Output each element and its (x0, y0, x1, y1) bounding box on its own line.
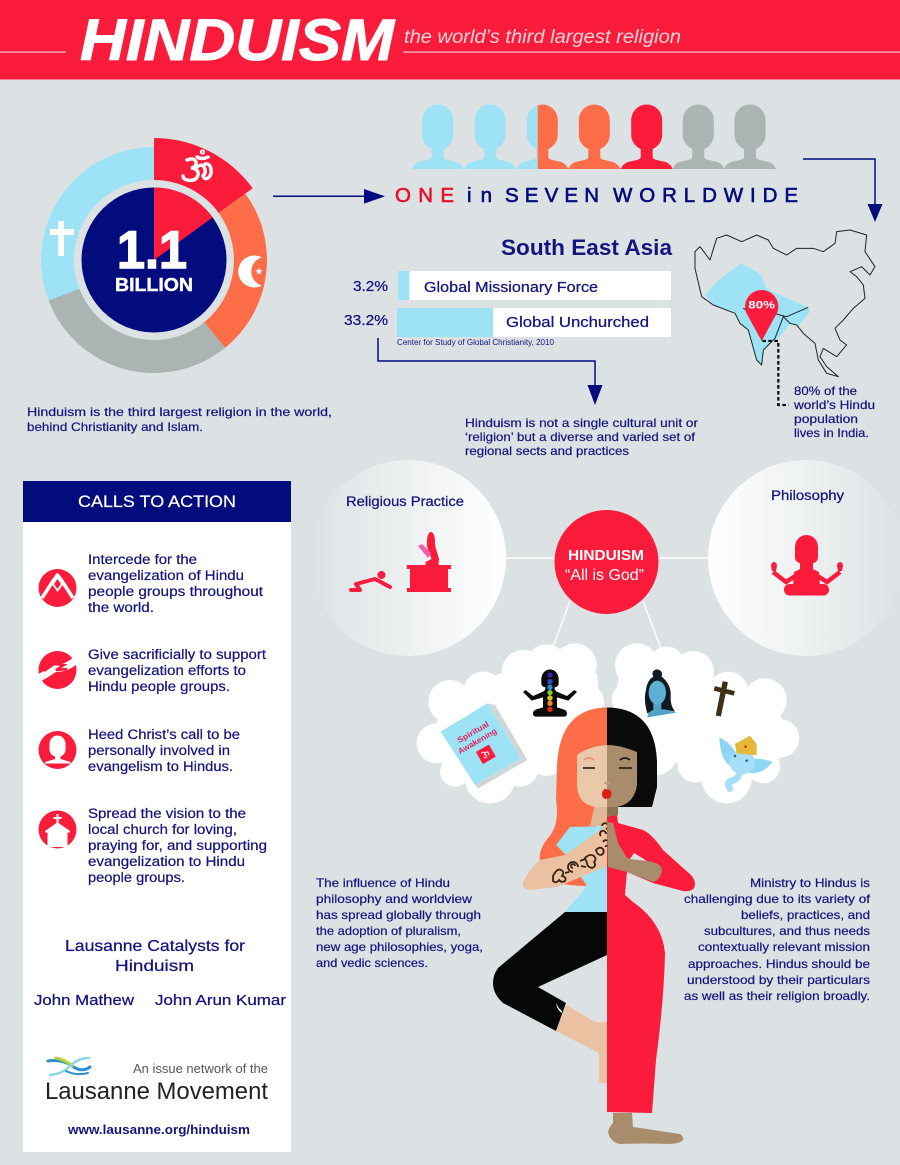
text: ministry to Hindus: understood by their particulars (687, 973, 870, 987)
icon: Spiritual Awakening book (441, 703, 527, 788)
text: ministry to Hindus: challenging due to its variety of (684, 892, 871, 906)
label: Religious Practice (346, 494, 464, 509)
call 2 text: Give sacrificially to support (88, 647, 266, 662)
map: South East Asia (695, 230, 875, 405)
logo: Lausanne Movement: Lausanne Movement (45, 1078, 268, 1105)
icon: crawling figure (351, 571, 390, 590)
heading: South East Asia: South East Asia (501, 235, 673, 260)
call 2 text: evangelization efforts to (88, 663, 246, 678)
catalyst names: John Mathew (34, 993, 135, 1009)
logo: Lausanne Movement: An issue network of the (133, 1061, 268, 1076)
panel heading: CALLS TO ACTION (78, 492, 236, 511)
bar chart: global unchurched: Global Unchurched (506, 315, 649, 331)
pin label: 80% (748, 300, 775, 312)
text: 80% in India: population (794, 412, 858, 426)
icon: chakra meditation figure (523, 669, 577, 717)
arm gap (630, 853, 647, 861)
call 1 text (88, 552, 263, 615)
icon: meditation (771, 535, 843, 596)
circle: philosophy (708, 460, 900, 656)
facial features (583, 758, 632, 799)
bar chart: global unchurched: 33.2% (344, 313, 388, 329)
bar chart: global unchurched (344, 308, 671, 337)
call 4 text: Spread the vision to the (88, 806, 246, 821)
left arm with henna (523, 822, 609, 890)
call 3 text: evangelism to Hindus. (88, 759, 233, 774)
catalysts heading (65, 938, 246, 975)
right arm (607, 822, 662, 882)
map: India region (705, 263, 810, 365)
donut caption: Hinduism is the third largest religion in the world, (27, 405, 332, 419)
bar chart: global missionary force: Global Missionary Force (424, 280, 598, 296)
red dress (607, 815, 695, 1113)
donut chart: world religions (41, 138, 267, 373)
text: 80% in India: lives in India. (794, 426, 869, 440)
text: ministry to Hindus: as well as their religion broadly. (684, 989, 870, 1003)
text: 80% in India (793, 384, 875, 440)
icon: kneeling figure on pedestal (407, 532, 451, 592)
right hair (607, 708, 657, 807)
call 4 text: evangelization to Hindu (88, 854, 245, 869)
cloud: right (612, 643, 799, 803)
text: global influence (316, 876, 483, 970)
text: global influence: the adoption of pluralism, (316, 924, 461, 938)
call 2 text (88, 647, 266, 694)
icon: praying hands (38, 569, 76, 607)
headline: one in seven worldwide: WORLDWIDE (613, 184, 798, 207)
logo swoosh (48, 1058, 90, 1075)
left hair (540, 708, 607, 886)
headline: one in seven worldwide: ONE (395, 184, 454, 207)
map pin (745, 290, 778, 341)
call 4 text: praying for, and supporting (88, 838, 267, 853)
thought clouds and icons (417, 643, 799, 803)
call 4 text: people groups. (88, 870, 185, 885)
catalysts heading: Hinduism (115, 958, 194, 975)
icon: giving hands (38, 651, 76, 689)
text: global influence: and vedic sciences. (316, 956, 428, 970)
header banner (0, 0, 900, 80)
people row: one in seven (412, 104, 776, 169)
catalyst names (34, 993, 286, 1009)
bar chart: global missionary force: 3.2% (353, 279, 388, 295)
foot (608, 1113, 683, 1144)
circle: Hinduism all is God (554, 510, 658, 614)
icon: church (38, 810, 76, 848)
text: global influence: The influence of Hindu (316, 876, 450, 890)
text: 80% in India: world’s Hindu (793, 398, 875, 412)
icon: Ganesh (719, 736, 773, 789)
subtitle: the world’s third largest religion (404, 27, 681, 48)
bar chart: global missionary force (353, 271, 671, 300)
website: www.lausanne.org/hinduism (67, 1122, 250, 1137)
text: global influence: philosophy and worldview (316, 892, 472, 906)
circle: Hinduism all is God: “All is God” (565, 567, 644, 584)
text: global influence: has spread globally through (316, 908, 481, 922)
call 1 text: evangelization of Hindu (88, 568, 244, 583)
icon: Shiva (645, 669, 677, 717)
logo: Lausanne Movement (45, 1058, 268, 1105)
arrow: to map (803, 159, 882, 222)
panel: calls to action (23, 481, 291, 1152)
icon: cross (50, 221, 74, 256)
text: ministry to Hindus: approaches. Hindus should be (688, 957, 870, 971)
call 1 text: Intercede for the (88, 552, 197, 567)
title: HINDUISM (80, 8, 396, 73)
icon: Spiritual Awakening book: Spiritual (456, 720, 491, 745)
text: diverse sects: regional sects and practices (465, 444, 629, 458)
illustration: half-and-half woman (493, 708, 695, 1144)
icon: person (38, 731, 76, 769)
icon: crescent and star (238, 255, 263, 288)
face (577, 745, 607, 807)
icon: om (183, 151, 211, 180)
arrow: chart to text (378, 338, 602, 405)
source note: Center for Study of Global Christianity, 2010 (397, 338, 555, 347)
bare leg (556, 1005, 607, 1083)
donut caption: behind Christianity and Islam. (27, 420, 203, 434)
text: global influence: new age philosophies, yoga, (316, 940, 483, 954)
text: diverse sects: Hinduism is not a single cultural unit or (465, 416, 698, 430)
catalyst names: John Arun Kumar (155, 993, 286, 1009)
call 3 text: Heed Christ’s call to be (88, 727, 240, 742)
text: diverse sects (465, 416, 698, 458)
text: ministry to Hindus: Ministry to Hindus is (750, 876, 870, 890)
icon: Spiritual Awakening book: Awakening (456, 727, 499, 756)
text: ministry to Hindus: contextually relevant mission (698, 940, 870, 954)
icon: cross (714, 682, 734, 716)
text: ministry to Hindus (684, 876, 871, 1003)
label: Philosophy (771, 488, 844, 503)
text: diverse sects: ‘religion’ but a diverse and varied set of (465, 430, 696, 444)
circle: Hinduism all is God: HINDUISM (568, 548, 644, 564)
arrow: donut to one in seven (273, 189, 385, 204)
call 1 text: the world. (88, 600, 154, 615)
map outline (695, 230, 875, 377)
text: 80% in India: 80% of the (794, 384, 857, 398)
donut centre figure: 1.1 (117, 221, 187, 280)
knee swoosh (556, 1003, 562, 1013)
leggings (493, 912, 607, 1031)
shirt (556, 826, 607, 912)
call 3 text (88, 727, 240, 774)
catalysts heading: Lausanne Catalysts for (65, 938, 246, 955)
neck (590, 800, 607, 826)
call 2 text: Hindu people groups. (88, 679, 230, 694)
call 4 text: local church for loving, (88, 822, 237, 837)
circle: religious practice (310, 460, 506, 656)
connector lines (505, 558, 709, 651)
call 4 text (88, 806, 267, 885)
text: ministry to Hindus: subcultures, and thus needs (704, 924, 870, 938)
cloud: left (417, 643, 604, 803)
headline: one in seven worldwide: in (467, 184, 492, 207)
dotted leader (762, 341, 789, 405)
headline: one in seven worldwide: SEVEN (505, 184, 599, 207)
donut centre label: BILLION (115, 275, 193, 295)
panel header (23, 481, 291, 522)
call 3 text: personally involved in (88, 743, 230, 758)
headline: one in seven worldwide (395, 184, 798, 207)
donut caption (27, 405, 332, 434)
text: ministry to Hindus: beliefs, practices, and (741, 908, 870, 922)
call 1 text: people groups throughout (88, 584, 263, 599)
